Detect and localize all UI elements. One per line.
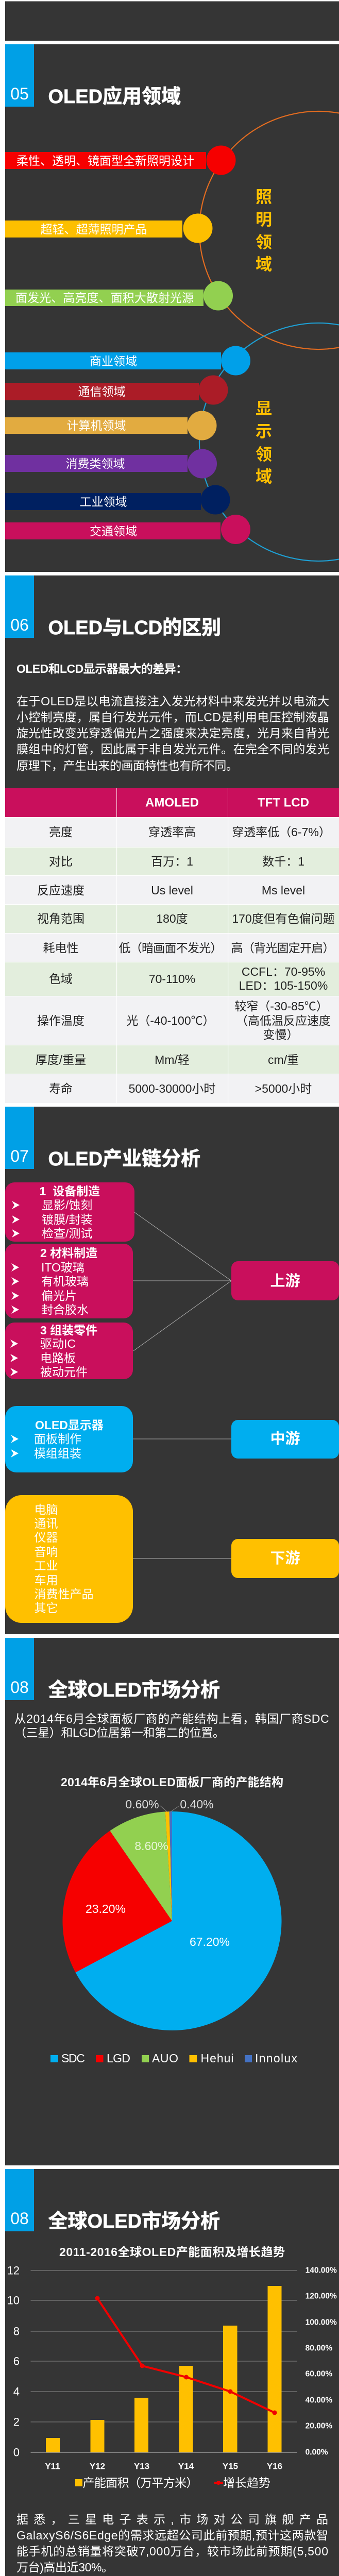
row: contrast: [49, 855, 304, 868]
connector line: midstream: [133, 1438, 231, 1439]
table header: TFT LCD: [258, 795, 309, 810]
pie legend: Innolux: [255, 2052, 298, 2065]
vertical label: display field: 显: [256, 399, 272, 418]
right axis labels: 80.00%: [306, 2344, 332, 2352]
vertical label: lighting field: [256, 188, 272, 274]
row: power consumption: 耗电性: [43, 941, 78, 955]
vertical label: display field: 领: [256, 445, 272, 464]
x axis labels: Y14: [178, 2462, 194, 2471]
row: contrast: 百万：1: [151, 855, 193, 868]
box: equipment manufacturing: [5, 1182, 134, 1242]
right axis labels: 40.00%: [306, 2396, 332, 2405]
box: downstream: 下游: [270, 1550, 300, 1567]
section number tag 05: [5, 44, 34, 107]
row: power consumption: 高（背光固定开启）: [231, 941, 335, 955]
row: operating temperature: 较窄（-30-85℃）: [234, 999, 328, 1013]
subheading: biggest difference: OLED和LCD显示器最大的差异：: [16, 662, 188, 675]
x axis labels: Y16: [267, 2462, 282, 2471]
row: brightness: 穿透率高: [148, 825, 196, 839]
bar: area light source: [5, 281, 233, 310]
box: upstream: 上游: [270, 1273, 300, 1290]
table header: [5, 788, 339, 817]
box: OLED display: OLED显示器: [35, 1418, 104, 1432]
bar: commercial: 商业领域: [90, 354, 137, 368]
row: color gamut: 70-110%: [149, 972, 195, 986]
box: equipment manufacturing: 1 设备制造: [39, 1184, 100, 1198]
connector lines: upstream: [133, 1212, 231, 1351]
box: midstream: 中游: [270, 1430, 300, 1447]
vertical label: lighting field: 领: [256, 233, 272, 251]
row: lifetime: >5000小时: [255, 1082, 312, 1095]
box: assembled components: 电路板: [40, 1351, 76, 1365]
box: materials manufacturing: 有机玻璃: [41, 1275, 89, 1288]
row: lifetime: 5000-30000小时: [129, 1082, 215, 1095]
capacity bars: [46, 2286, 281, 2452]
bar: flexible transparent lighting: [5, 145, 236, 175]
box: OLED display: 面板制作: [34, 1432, 81, 1446]
row: brightness: 亮度: [49, 825, 73, 839]
row: operating temperature: 光（-40-100℃）: [126, 1014, 215, 1027]
row: contrast: 数千：1: [262, 855, 304, 868]
text block: difference explanation: 原理下，产生出来的画面特性也有所不同。: [16, 759, 238, 772]
box: end products: 通讯: [34, 1517, 58, 1530]
pie legend: AUO: [152, 2052, 178, 2065]
box: end products: 工业: [34, 1559, 58, 1572]
row: brightness: 穿透率低（6-7%）: [232, 825, 331, 839]
left axis labels: 0: [13, 2446, 20, 2459]
box: materials manufacturing: [5, 1244, 133, 1318]
vertical label: display field: 示: [256, 422, 272, 440]
pie chart: panel maker capacity share: 23.20%: [86, 1902, 126, 1916]
bar: flexible transparent lighting: 柔性、透明、镜面型全新照明设计: [16, 154, 194, 167]
arc: display circle: [199, 323, 339, 561]
text block: Samsung demand: 万台)高出近30%。: [16, 2561, 113, 2574]
box: equipment manufacturing: 镀膜/封装: [42, 1213, 92, 1226]
row: viewing angle: [37, 912, 335, 925]
text block: difference explanation: 在于OLED是以电流直接注入发光材料中来发光并以电流大: [16, 694, 329, 708]
heading: OLED application fields: OLED应用领域: [48, 86, 181, 108]
box: end products: 车用: [34, 1573, 58, 1587]
pie legend: Hehui: [201, 2052, 234, 2065]
vertical label: lighting field: 照: [256, 188, 272, 206]
bar: consumer: 消费类领域: [66, 457, 125, 470]
row: viewing angle: 170度但有色偏问题: [232, 912, 335, 925]
panel: 06 OLED vs LCD: [5, 575, 339, 788]
bar: computers: 计算机领域: [67, 419, 126, 432]
box: downstream: [231, 1539, 339, 1578]
vertical label: display field: [256, 399, 272, 486]
x axis labels: Y15: [223, 2462, 238, 2471]
box: materials manufacturing: ITO玻璃: [41, 1261, 84, 1274]
row: viewing angle: 视角范围: [37, 912, 84, 925]
row: response speed: 反应速度: [37, 884, 84, 897]
arc: lighting circle: [199, 111, 339, 349]
right axis labels: [306, 2266, 337, 2456]
box: OLED display: [5, 1406, 133, 1472]
box: end products: 电脑: [34, 1503, 58, 1516]
box: upstream: [231, 1261, 339, 1300]
box: midstream: [231, 1420, 339, 1459]
box: assembled components: 被动元件: [40, 1365, 88, 1379]
right axis labels: 20.00%: [306, 2421, 332, 2431]
row: color gamut: CCFL：70-95%: [242, 965, 325, 978]
row: color gamut: LED：105-150%: [239, 979, 328, 992]
section number tag 05: 05: [10, 84, 29, 103]
table: AMOLED vs TFT LCD comparison: [5, 788, 339, 1103]
row: operating temperature: 操作温度: [37, 1014, 84, 1027]
row: response speed: [37, 884, 305, 897]
row: thickness and weight: [36, 1053, 299, 1066]
left axis labels: 2: [13, 2415, 20, 2429]
chart title: capacity structure: 2014年6月全球OLED面板厂商的产能结构: [61, 1775, 283, 1789]
box: materials manufacturing: 封合胶水: [41, 1303, 89, 1316]
box: materials manufacturing: 偏光片: [41, 1289, 77, 1302]
right axis labels: 100.00%: [306, 2318, 337, 2327]
row: thickness and weight: cm/重: [268, 1053, 299, 1066]
right axis labels: 120.00%: [306, 2292, 337, 2301]
row: lifetime: 寿命: [49, 1082, 73, 1095]
row: response speed: Us level: [151, 884, 193, 897]
box: assembled components: [5, 1323, 133, 1379]
bar: ultra thin lighting: 超轻、超薄照明产品: [40, 223, 147, 236]
text block: capacity intro: 从2014年6月全球面板厂商的产能结构上看，韩国厂商SDC: [14, 1712, 329, 1725]
row: lifetime: [49, 1082, 312, 1095]
row: thickness and weight: Mm/轻: [155, 1053, 190, 1066]
box: materials manufacturing: 2 材料制造: [40, 1246, 97, 1260]
text block: capacity intro: [14, 1712, 329, 1739]
table header: AMOLED: [145, 795, 199, 810]
text block: difference explanation: 膜组中的灯管，因此属于非自发光元件。在完全不同的发光: [16, 742, 329, 756]
connector line: downstream: [133, 1558, 231, 1559]
box: equipment manufacturing: 检查/测试: [42, 1227, 92, 1240]
right axis labels: 140.00%: [306, 2266, 337, 2275]
left axis labels: 12: [7, 2264, 20, 2277]
bar: ultra thin lighting: [5, 213, 212, 243]
left axis labels: 8: [13, 2325, 20, 2338]
row: response speed: Ms level: [262, 884, 305, 897]
heading: global OLED market: 全球OLED市场分析: [48, 1680, 220, 1701]
pie legend: [50, 2052, 298, 2065]
left axis labels: [7, 2264, 20, 2459]
x axis labels: Y11: [45, 2462, 60, 2471]
bar: consumer: [5, 449, 217, 478]
right axis labels: 0.00%: [306, 2448, 328, 2456]
vertical label: display field: 域: [256, 467, 272, 486]
pie chart: panel maker capacity share: 8.60%: [134, 1839, 168, 1853]
left axis labels: 6: [13, 2354, 20, 2368]
row: brightness: [49, 825, 331, 839]
box: OLED display: 模组组装: [34, 1447, 81, 1460]
vertical label: lighting field: 明: [256, 210, 272, 229]
table row backgrounds: [5, 817, 339, 1103]
x axis labels: Y13: [134, 2462, 149, 2471]
text block: Samsung demand: 能手机的总销量将突破7,000万台，较市场此前预期(5,500: [16, 2545, 328, 2558]
pie chart: panel maker capacity share: 67.20%: [190, 1935, 230, 1948]
bar: communications: 通信领域: [78, 385, 126, 398]
row: viewing angle: 180度: [156, 912, 188, 925]
row: thickness and weight: 厚度/重量: [36, 1053, 86, 1066]
box: assembled components: 驱动IC: [40, 1337, 76, 1350]
left axis labels: 4: [13, 2385, 20, 2398]
section number tag 07: [5, 1107, 34, 1169]
left axis labels: 10: [7, 2294, 20, 2307]
section number tag 08: [5, 1638, 34, 1700]
chart legend: [75, 2476, 270, 2489]
text block: capacity intro: （三星）和LGD位居第一和第二的位置。: [14, 1726, 225, 1739]
section number tag 06: 06: [10, 616, 29, 634]
heading: OLED industry chain: OLED产业链分析: [48, 1148, 200, 1170]
pie chart: panel maker capacity share: 0.40%: [180, 1798, 214, 1811]
heading: OLED vs LCD: OLED与LCD的区别: [48, 617, 221, 639]
row: color gamut: 色域: [49, 972, 73, 986]
pie legend: LGD: [107, 2052, 130, 2065]
section number tag 07: 07: [10, 1147, 29, 1165]
growth trend line: [95, 2296, 277, 2415]
bar: communications: [5, 375, 228, 405]
section number tag 08: [5, 2169, 34, 2231]
row: operating temperature: （高低温反应速度: [236, 1014, 331, 1027]
chart legend: 产能面积（万平方米）: [82, 2476, 198, 2489]
row: power consumption: 低（暗画面不发光）: [118, 941, 223, 955]
box: end products: [5, 1495, 133, 1623]
text block: Samsung demand: [16, 2513, 328, 2574]
row: operating temperature: [37, 999, 331, 1041]
box: assembled components: 3 组装零件: [40, 1324, 97, 1337]
box: end products: 其它: [34, 1601, 58, 1615]
chart legend: 增长趋势: [223, 2476, 270, 2489]
right axis labels: 60.00%: [306, 2370, 332, 2378]
bar: computers: [5, 411, 216, 440]
pie legend: SDC: [61, 2052, 85, 2065]
bar: industrial: 工业领域: [79, 495, 127, 509]
bar: industrial: [5, 485, 230, 514]
text block: difference explanation: 小控制亮度，属自行发光元件，而LCD是利用电压控制液晶: [16, 710, 329, 724]
section number tag 06: [5, 575, 34, 638]
x axis labels: [45, 2462, 282, 2471]
text block: difference explanation: [16, 694, 329, 772]
panel: top dark strip: [5, 1, 339, 41]
combo chart: capacity bars and growth line: [7, 2264, 337, 2489]
box: equipment manufacturing: 显影/蚀刻: [42, 1198, 92, 1212]
panel: 08 global OLED market, capacity trend: [5, 2169, 339, 2576]
text block: Samsung demand: GalaxyS6/S6Edge的需求远超公司此前预期,预计这两款智: [16, 2529, 328, 2542]
heading: global OLED market: 全球OLED市场分析: [48, 2211, 220, 2232]
chart title: capacity area and growth: 2011-2016全球OLED产能面积及增长趋势: [59, 2245, 285, 2259]
pie chart: panel maker capacity share: 0.60%: [125, 1798, 159, 1811]
pie chart: panel maker capacity share: [62, 1798, 281, 2030]
bar: commercial: [5, 346, 250, 375]
panel: 07 OLED industry chain: [5, 1107, 339, 1634]
row: contrast: 对比: [49, 855, 73, 868]
bar: transport: 交通领域: [90, 524, 137, 538]
box: end products: 音响: [34, 1545, 58, 1558]
panel: 05 OLED application fields: [5, 44, 339, 572]
bar: area light source: 面发光、高亮度、面积大散射光源: [15, 291, 194, 304]
section number tag 08: 08: [10, 2209, 29, 2228]
x axis labels: Y12: [90, 2462, 105, 2471]
bar: transport: [5, 515, 250, 544]
box: end products: 仪器: [34, 1531, 58, 1544]
panel: 08 global OLED market, capacity share: [5, 1638, 339, 2165]
row: color gamut: [49, 965, 328, 992]
row: operating temperature: 变慢）: [263, 1028, 299, 1041]
text block: Samsung demand: 据悉，三星电子表示,市场对公司旗舰产品: [16, 2513, 328, 2526]
vertical label: lighting field: 域: [256, 255, 272, 274]
text block: difference explanation: 旋光性改变光穿透偏光片之强度来决定亮度，光月来自背光: [16, 726, 329, 740]
box: end products: 消费性产品: [34, 1587, 94, 1601]
section number tag 08: 08: [10, 1678, 29, 1697]
row: power consumption: [43, 941, 335, 955]
